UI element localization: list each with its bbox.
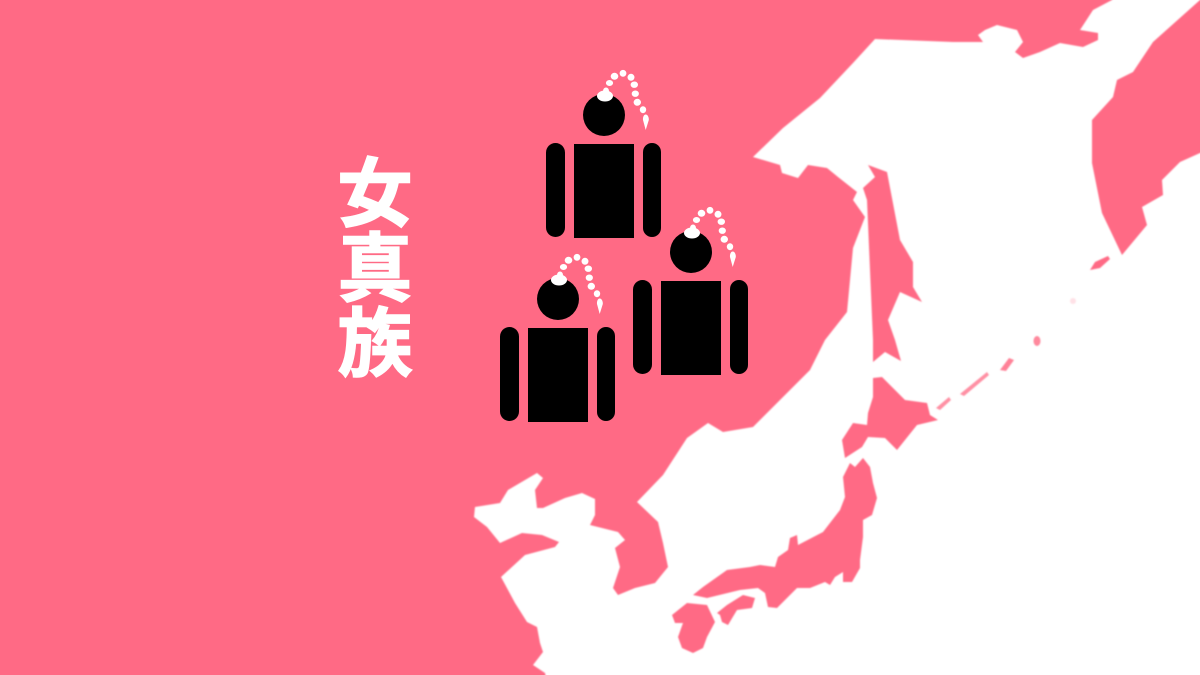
Kyushu xyxy=(672,603,715,653)
Kuril islands xyxy=(936,256,1110,410)
vertical title: Jurchen people: 族 xyxy=(337,302,412,386)
Shikoku xyxy=(717,595,755,625)
vertical title: Jurchen people: 真 xyxy=(337,227,412,311)
Honshu xyxy=(693,458,877,608)
figure: lower-left person with queue hairstyle xyxy=(500,254,615,422)
Kamchatka xyxy=(1092,0,1200,255)
vertical title: Jurchen people xyxy=(337,152,413,386)
figure: right person with queue hairstyle xyxy=(633,207,748,375)
Hokkaido xyxy=(842,377,938,458)
figure: top person with queue hairstyle xyxy=(546,70,661,238)
vertical title: Jurchen people: 女 xyxy=(337,152,412,236)
Sakhalin xyxy=(863,165,922,362)
